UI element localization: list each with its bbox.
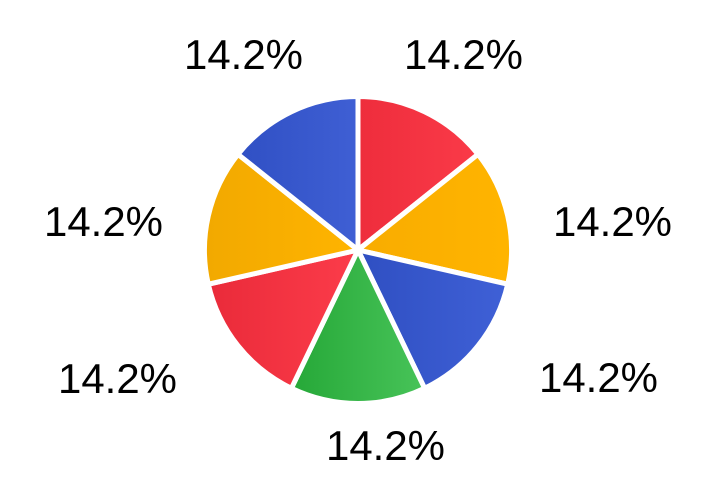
slice: yellow left <box>204 154 358 284</box>
slice: blue top left <box>238 96 358 250</box>
label: bottom: 14.2% <box>326 422 445 469</box>
slice: red top right <box>358 96 478 250</box>
slice: blue bottom right <box>358 250 508 388</box>
label: top left: 14.2% <box>184 31 303 78</box>
slice: green bottom <box>291 250 425 404</box>
label: top right: 14.2% <box>404 31 523 78</box>
label: left: 14.2% <box>44 198 163 245</box>
label: bottom left: 14.2% <box>58 355 177 402</box>
pie chart <box>204 96 512 404</box>
slice: yellow right <box>358 154 512 284</box>
slice: red bottom left <box>208 250 358 388</box>
label: bottom right: 14.2% <box>539 354 658 401</box>
label: right: 14.2% <box>553 198 672 245</box>
